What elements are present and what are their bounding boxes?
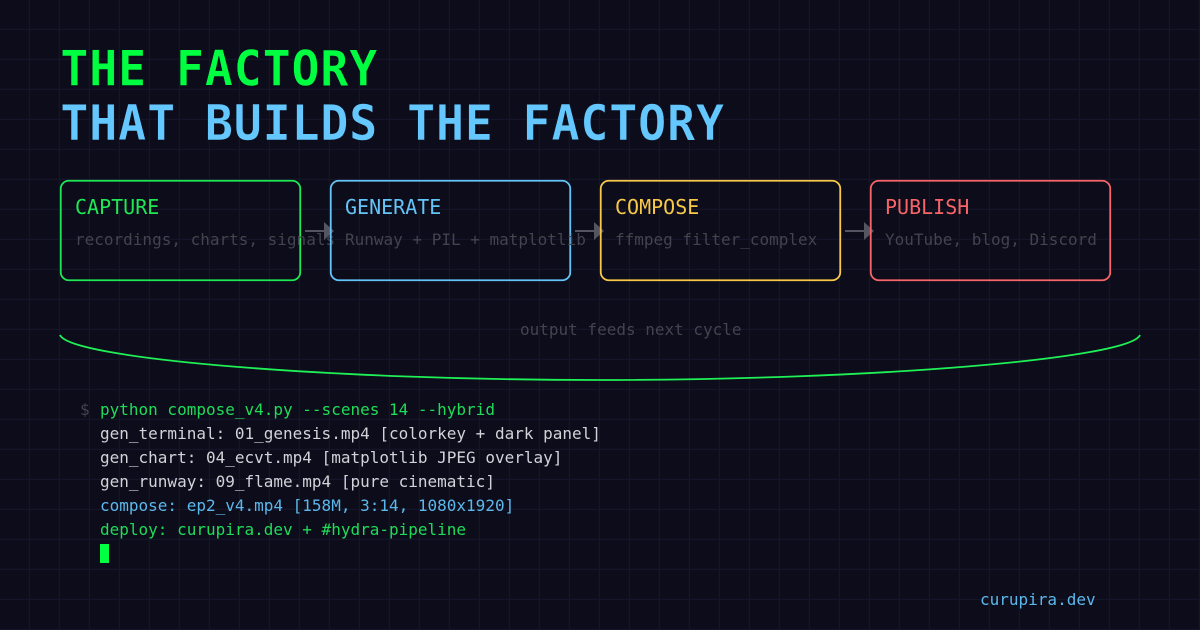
- terminal: [80, 400, 601, 563]
- panel: capture: CAPTURE: [75, 195, 159, 219]
- arrow: generate to compose: [575, 222, 604, 240]
- footer url: curupira.dev: [980, 590, 1096, 609]
- title: THE FACTORY: [60, 41, 378, 98]
- arrow: compose to publish: [845, 222, 874, 240]
- feedback loop curve: [60, 335, 1140, 380]
- panel: capture: recordings, charts, signals: [75, 230, 335, 249]
- terminal: python compose_v4.py --scenes 14 --hybrid: [100, 400, 495, 419]
- terminal: deploy: curupira.dev + #hydra-pipeline: [100, 520, 466, 539]
- panel: compose: ffmpeg filter_complex: [615, 230, 818, 249]
- panel: compose: COMPOSE: [615, 195, 699, 219]
- terminal: compose: ep2_v4.mp4 [158M, 3:14, 1080x1920]: [100, 496, 514, 515]
- terminal: gen_terminal: 01_genesis.mp4 [colorkey + dark panel]: [100, 424, 601, 443]
- panel: compose: [601, 181, 840, 280]
- loop label: output feeds next cycle: [520, 320, 742, 339]
- panel: generate: Runway + PIL + matplotlib: [345, 230, 586, 249]
- terminal cursor: [100, 544, 109, 563]
- title: [60, 41, 725, 152]
- terminal: gen_chart: 04_ecvt.mp4 [matplotlib JPEG overlay]: [100, 448, 562, 467]
- terminal: gen_runway: 09_flame.mp4 [pure cinematic]: [100, 472, 495, 491]
- panel: publish: [871, 181, 1110, 280]
- panel: publish: PUBLISH: [885, 195, 969, 219]
- panel: capture: [61, 181, 335, 280]
- title: THAT BUILDS THE FACTORY: [60, 96, 725, 152]
- arrow: capture to generate: [305, 222, 334, 240]
- panel: publish: YouTube, blog, Discord: [885, 230, 1097, 249]
- panel: generate: GENERATE: [345, 195, 441, 219]
- terminal: $: [80, 400, 90, 419]
- panel: generate: [331, 181, 586, 280]
